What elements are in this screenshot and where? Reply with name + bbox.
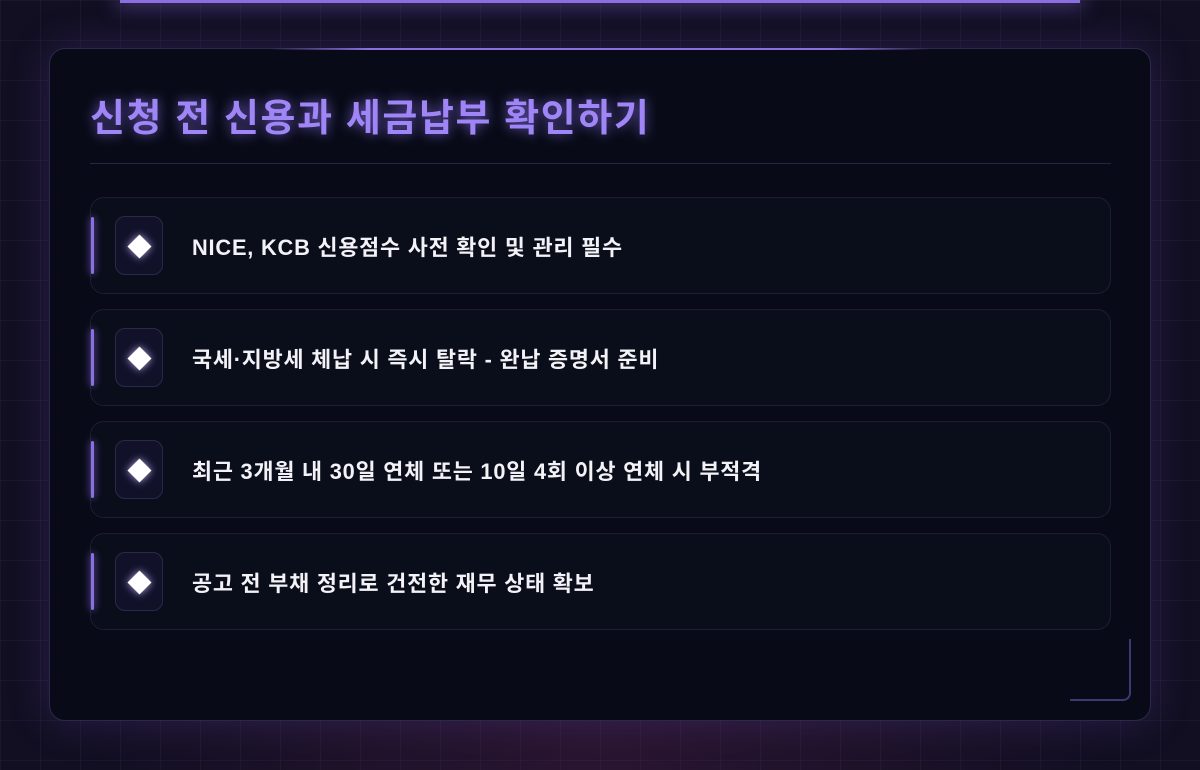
title: 신청 전 신용과 세금납부 확인하기 [90,98,650,140]
corner bracket [1070,639,1131,701]
text 2: 국세·지방세 체납 시 즉시 탈락 - 완납 증명서 준비 [192,347,659,372]
item 1 [90,197,1111,294]
item 4 [90,533,1111,630]
icon: diamond [115,552,163,611]
text 4: 공고 전 부채 정리로 건전한 재무 상태 확보 [192,571,594,596]
icon: diamond [115,216,163,275]
text 3: 최근 3개월 내 30일 연체 또는 10일 4회 이상 연체 시 부적격 [192,459,762,484]
icon: diamond [115,440,163,499]
item 3 [90,421,1111,518]
icon: diamond [115,328,163,387]
item 2 [90,309,1111,406]
text 1: NICE, KCB 신용점수 사전 확인 및 관리 필수 [192,235,623,260]
